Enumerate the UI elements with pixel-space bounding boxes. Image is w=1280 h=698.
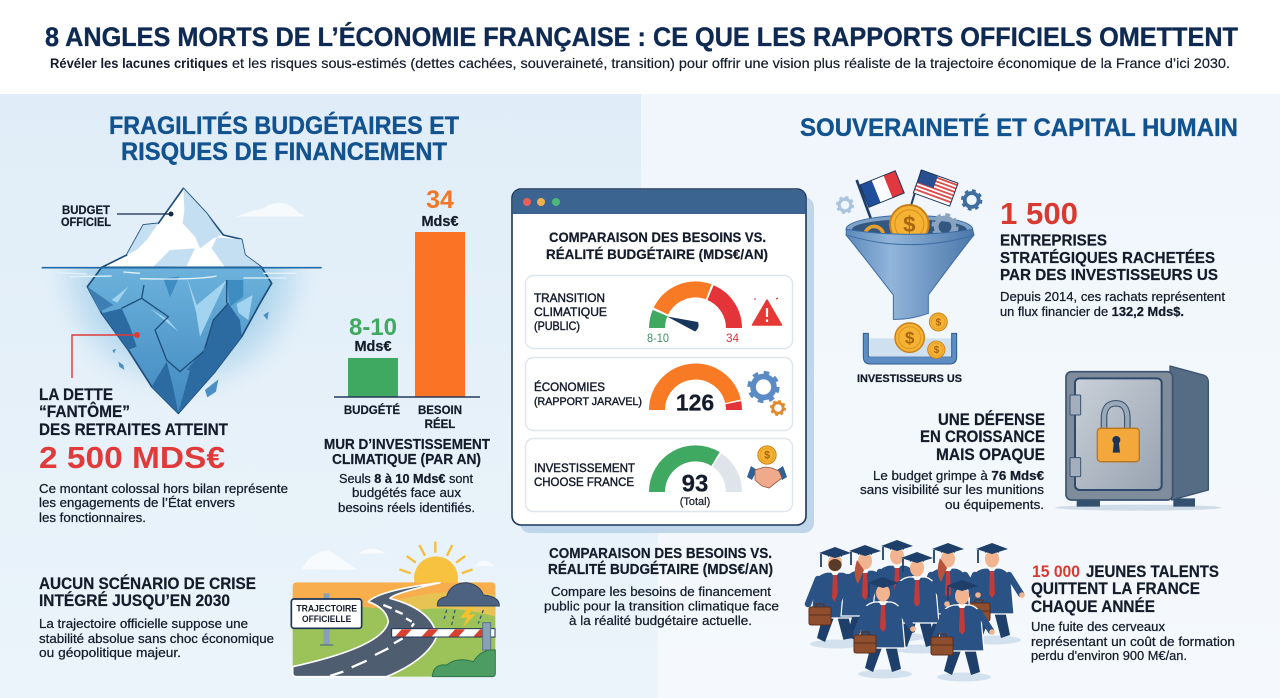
text block: jeunes talents: perdu d'environ 900 M€/an. xyxy=(1031,648,1187,663)
text block: dette fantôme: DES RETRAITES ATTEINT xyxy=(39,420,229,439)
panel: comparison window: COMPARAISON DES BESOINS VS. xyxy=(549,229,766,245)
callout: budget officiel: BUDGET xyxy=(62,205,110,217)
text block: défense: ou équipements. xyxy=(945,497,1044,512)
text block: mur d'investissement: Seuls 8 à 10 Mds€ sont xyxy=(339,471,473,486)
text block: aucun scénario de crise: AUCUN SCÉNARIO DE CRISE xyxy=(39,574,256,593)
text block: défense xyxy=(860,410,1045,512)
text block: aucun scénario de crise: La trajectoire officielle suppose une xyxy=(39,616,248,631)
bar chart: mur d'investissement xyxy=(334,186,480,431)
text block: jeunes talents: JEUNES TALENTS xyxy=(1086,563,1219,581)
bar chart: mur d'investissement: 8-10 xyxy=(349,314,397,341)
icon: road with barrier and storm xyxy=(291,542,499,677)
text block: 1 500 entreprises: un flux financier de 132,2 Mds$. xyxy=(1000,304,1184,319)
icon: graduates leaving with briefcases xyxy=(808,540,1025,682)
text block: 1 500 entreprises: PAR DES INVESTISSEURS US xyxy=(1000,267,1218,284)
row: économies: 126 xyxy=(676,390,714,416)
bar chart: mur d'investissement: BESOIN xyxy=(418,405,462,417)
bar chart: mur d'investissement: Mds€ xyxy=(354,339,392,355)
row: économies: (RAPPORT JARAVEL) xyxy=(534,396,642,408)
text block: défense: sans visibilité sur les munitions xyxy=(860,482,1045,497)
text block: comparaison des besoins xyxy=(544,546,779,628)
text block: mur d'investissement: besoins réels identifiés. xyxy=(338,500,475,515)
heading: souveraineté: SOUVERAINETÉ ET CAPITAL HUMAIN xyxy=(800,113,1238,142)
row: transition climatique: (PUBLIC) xyxy=(534,319,580,333)
text block: comparaison des besoins: COMPARAISON DES BESOINS VS. xyxy=(549,546,772,562)
text block: dette fantôme: “FANTÔME” xyxy=(39,402,130,421)
row: transition climatique: 34 xyxy=(726,331,739,345)
row: économies xyxy=(526,358,792,430)
text block: dette fantôme: LA DETTE xyxy=(39,385,113,404)
text block: défense: EN CROISSANCE xyxy=(920,428,1045,446)
callout: budget officiel xyxy=(61,205,174,229)
label: investisseurs us: INVESTISSEURS US xyxy=(857,373,962,385)
text block: défense: UNE DÉFENSE xyxy=(938,410,1045,429)
text block: mur d'investissement xyxy=(324,436,490,515)
text block: aucun scénario de crise: ou géopolitique majeur. xyxy=(39,645,181,660)
bar chart: mur d'investissement: 34 xyxy=(426,186,454,214)
row: transition climatique: TRANSITION xyxy=(534,291,605,305)
text block: dette fantôme: les engagements de l’État envers xyxy=(39,495,236,510)
text block: 1 500 entreprises: 1 500 xyxy=(1000,196,1078,231)
bar chart: mur d'investissement: RÉEL xyxy=(425,418,455,431)
text block: jeunes talents: QUITTENT LA FRANCE xyxy=(1031,580,1200,598)
panel: fragilités background xyxy=(0,94,658,698)
text block: défense: Le budget grimpe à 76 Mds€ xyxy=(873,468,1044,483)
row: économies: ÉCONOMIES xyxy=(534,379,605,394)
text block: 1 500 entreprises xyxy=(1000,196,1225,319)
text block: 1 500 entreprises: Depuis 2014, ces rachats représentent xyxy=(1000,289,1225,304)
text block: aucun scénario de crise: stabilité absolue sans choc économique xyxy=(39,631,274,646)
text block: jeunes talents xyxy=(1031,563,1235,663)
text block: dette fantôme: les fonctionnaires. xyxy=(39,510,146,525)
text block: jeunes talents: Une fuite des cerveaux xyxy=(1031,619,1165,634)
bar chart: mur d'investissement: Mds€ xyxy=(421,214,459,230)
text block: comparaison des besoins: Compare les besoins de financement xyxy=(551,584,771,599)
text block: aucun scénario de crise xyxy=(39,574,274,660)
row: investissement choose france: INVESTISSEMENT xyxy=(534,461,636,475)
panel: comparison window xyxy=(512,189,814,533)
icon: funnel with flags and coins xyxy=(837,170,981,364)
icon: iceberg xyxy=(40,188,323,547)
callout: red leader line xyxy=(72,332,140,378)
text block: défense: MAIS OPAQUE xyxy=(936,446,1045,464)
text block: jeunes talents: CHAQUE ANNÉE xyxy=(1031,597,1155,616)
row: investissement choose france xyxy=(526,438,792,512)
text block: jeunes talents: 15 000 xyxy=(1032,563,1080,581)
heading: fragilités budgétaires: FRAGILITÉS BUDGÉTAIRES ET xyxy=(109,111,459,140)
text block: dette fantôme xyxy=(39,385,288,525)
text block: jeunes talents: représentant un coût de formation xyxy=(1031,634,1235,649)
text block: dette fantôme: Ce montant colossal hors bilan représente xyxy=(39,481,288,496)
heading: fragilités budgétaires: RISQUES DE FINANCEMENT xyxy=(121,138,447,166)
row: transition climatique xyxy=(526,276,792,348)
subtitle: et les risques sous-estimés (dettes cachées, souveraineté, transition) pour offrir une vision plus réaliste de la trajectoire économique de la France d’ici 2030. xyxy=(232,55,1230,71)
text block: mur d'investissement: MUR D’INVESTISSEMENT xyxy=(324,436,490,453)
row: investissement choose france: 93 xyxy=(682,470,708,498)
bar chart: mur d'investissement: BUDGÉTÉ xyxy=(344,404,400,417)
text block: aucun scénario de crise: INTÉGRÉ JUSQU’EN 2030 xyxy=(39,591,230,610)
text block: dette fantôme: 2 500 MDS€ xyxy=(39,440,225,475)
text block: 1 500 entreprises: ENTREPRISES xyxy=(1000,232,1107,250)
text block: comparaison des besoins: RÉALITÉ BUDGÉTAIRE (MDS€/AN) xyxy=(548,561,773,578)
text block: mur d'investissement: CLIMATIQUE (PAR AN) xyxy=(332,451,481,468)
text block: mur d'investissement: budgétés face aux xyxy=(352,485,462,500)
callout: budget officiel: OFFICIEL xyxy=(61,217,111,229)
icon: safe with padlock xyxy=(1055,366,1222,511)
text block: comparaison des besoins: à la réalité budgétaire actuelle. xyxy=(569,613,752,628)
text block: 1 500 entreprises: STRATÉGIQUES RACHETÉES xyxy=(1000,248,1215,267)
text block: comparaison des besoins: public pour la transition climatique face xyxy=(544,598,779,614)
row: transition climatique: CLIMATIQUE xyxy=(534,305,607,319)
subtitle: Révéler les lacunes critiques xyxy=(50,55,228,71)
heading: fragilités budgétaires xyxy=(109,111,459,166)
icon: road with barrier and storm: OFFICIELLE xyxy=(302,614,351,624)
row: transition climatique: 8-10 xyxy=(647,331,669,345)
row: investissement choose france: CHOOSE FRANCE xyxy=(534,475,634,489)
icon: road with barrier and storm: TRAJECTOIRE xyxy=(296,603,357,613)
panel: comparison window: RÉALITÉ BUDGÉTAIRE (MDS€/AN) xyxy=(546,246,768,262)
row: investissement choose france: (Total) xyxy=(680,496,710,508)
